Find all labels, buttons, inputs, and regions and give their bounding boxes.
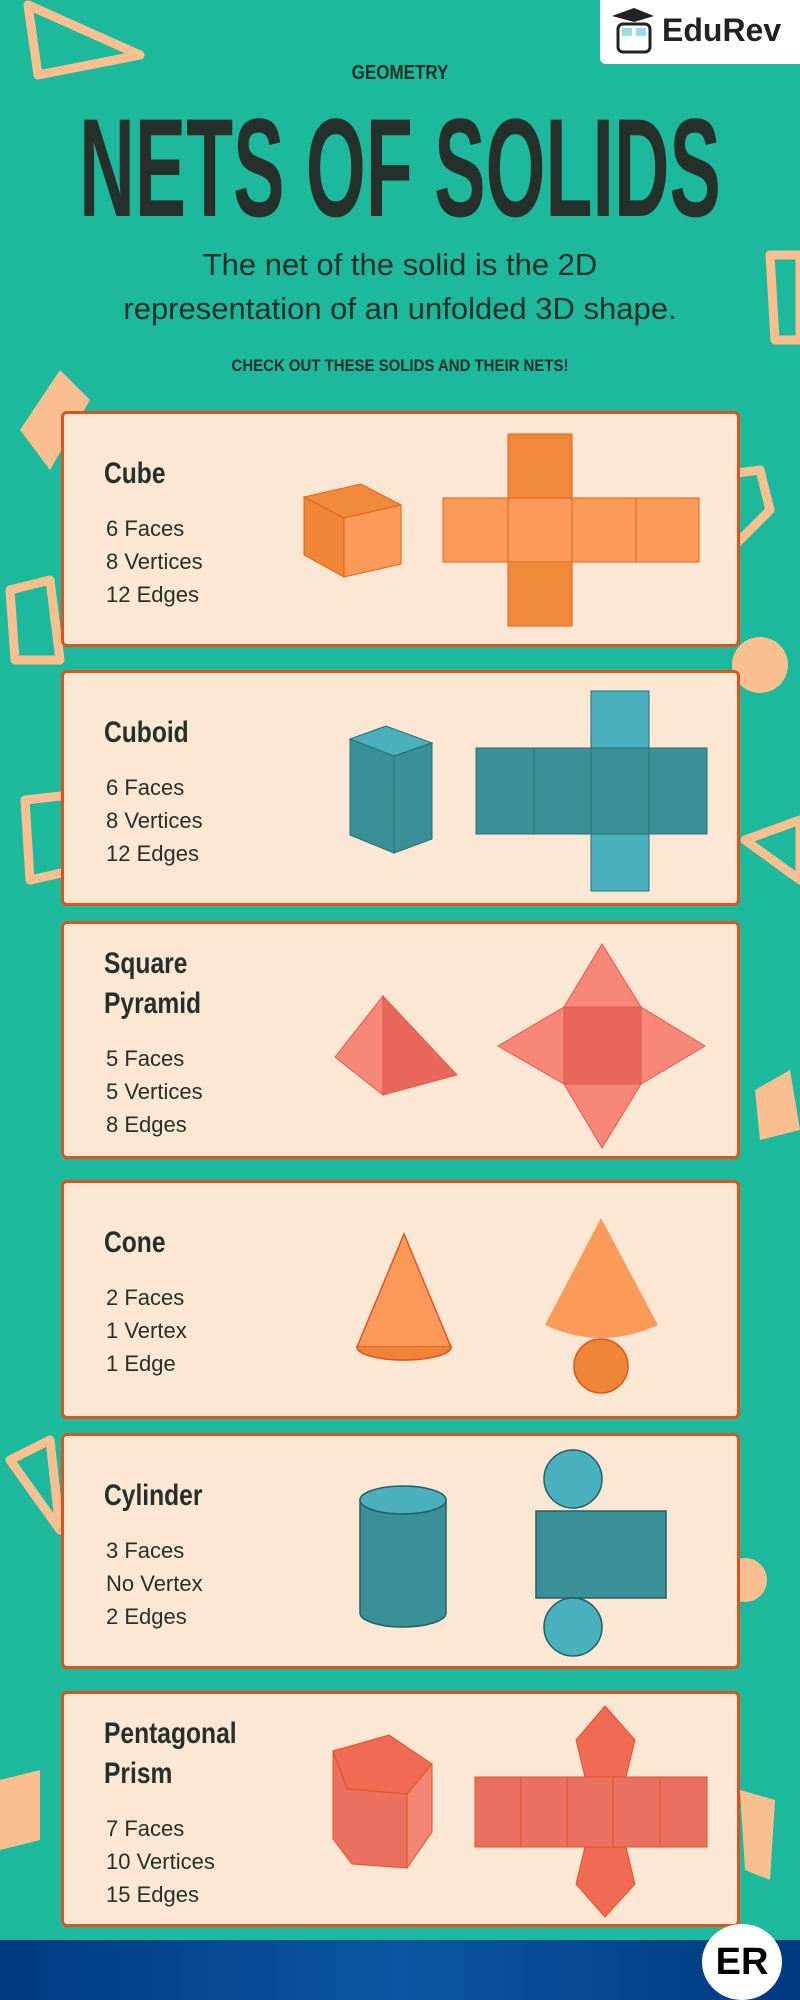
text: cuboid stats: 8 Vertices	[106, 808, 203, 833]
icon: cone	[357, 1234, 451, 1360]
text: prism name	[104, 1717, 237, 1790]
text: prism stats: 15 Edges	[106, 1882, 199, 1907]
text: prism stats	[106, 1816, 215, 1907]
text: pyramid stats: 5 Faces	[106, 1046, 184, 1071]
icon: cylinder	[360, 1486, 446, 1627]
text: cube stats: 6 Faces	[106, 516, 184, 541]
text: pyramid stats: 5 Vertices	[106, 1079, 203, 1104]
text: cube stats: 8 Vertices	[106, 549, 203, 574]
subtitle: The net of the solid is the 2D	[203, 247, 597, 282]
text: pyramid name: Square	[104, 947, 187, 980]
text: pyramid name	[104, 947, 201, 1020]
text: cone stats: 1 Edge	[106, 1351, 176, 1376]
text: cuboid stats: 12 Edges	[106, 841, 199, 866]
text: cuboid stats	[106, 775, 203, 866]
text: cone stats	[106, 1285, 187, 1376]
text: cylinder stats: 3 Faces	[106, 1538, 184, 1563]
text: cone name: Cone	[104, 1226, 166, 1259]
net: pyramid	[498, 944, 705, 1148]
text: cylinder stats: 2 Edges	[106, 1604, 187, 1629]
text: cone stats: 2 Faces	[106, 1285, 184, 1310]
text: cuboid name: Cuboid	[104, 716, 189, 749]
subtitle	[123, 247, 677, 326]
footer band	[0, 1940, 800, 2000]
text: cone stats: 1 Vertex	[106, 1318, 187, 1343]
text: prism name: Prism	[104, 1757, 172, 1790]
title: NETS OF SOLIDS	[79, 89, 721, 246]
net: cuboid	[476, 691, 707, 891]
panel: square pyramid	[61, 921, 740, 1159]
panel: cuboid	[61, 670, 740, 906]
text: cylinder stats: No Vertex	[106, 1571, 203, 1596]
net: cube	[443, 434, 699, 626]
text: prism stats: 10 Vertices	[106, 1849, 215, 1874]
icon: pentagonal prism	[333, 1735, 432, 1868]
icon: pyramid	[335, 996, 457, 1095]
text: pyramid name: Pyramid	[104, 987, 201, 1020]
text: cube name: Cube	[104, 457, 166, 490]
panel: cone	[61, 1180, 740, 1419]
text: prism stats: 7 Faces	[106, 1816, 184, 1841]
text: cylinder name: Cylinder	[104, 1479, 202, 1512]
tagline: CHECK OUT THESE SOLIDS AND THEIR NETS!	[232, 356, 568, 375]
text: pyramid stats: 8 Edges	[106, 1112, 187, 1137]
text: prism name: Pentagonal	[104, 1717, 237, 1750]
text: cube stats	[106, 516, 203, 607]
panel: cube	[61, 411, 740, 647]
icon: cuboid	[350, 726, 432, 853]
badge: ER: ER	[716, 1941, 768, 1983]
text: cube stats: 12 Edges	[106, 582, 199, 607]
text: pyramid stats	[106, 1046, 203, 1137]
subtitle: representation of an unfolded 3D shape.	[123, 291, 677, 326]
icon: cube	[304, 484, 401, 577]
net: pentagonal prism	[475, 1706, 707, 1917]
logo: EduRev: EduRev	[662, 12, 781, 48]
text: cylinder stats	[106, 1538, 203, 1629]
panel: cylinder	[61, 1433, 740, 1669]
badge: ER	[702, 1924, 782, 2000]
logo: EduRev	[600, 0, 800, 64]
text: cuboid stats: 6 Faces	[106, 775, 184, 800]
heading: geometry: GEOMETRY	[352, 62, 448, 84]
net: cylinder	[536, 1450, 666, 1656]
panel: pentagonal prism	[61, 1691, 740, 1927]
net: cone	[545, 1218, 658, 1393]
